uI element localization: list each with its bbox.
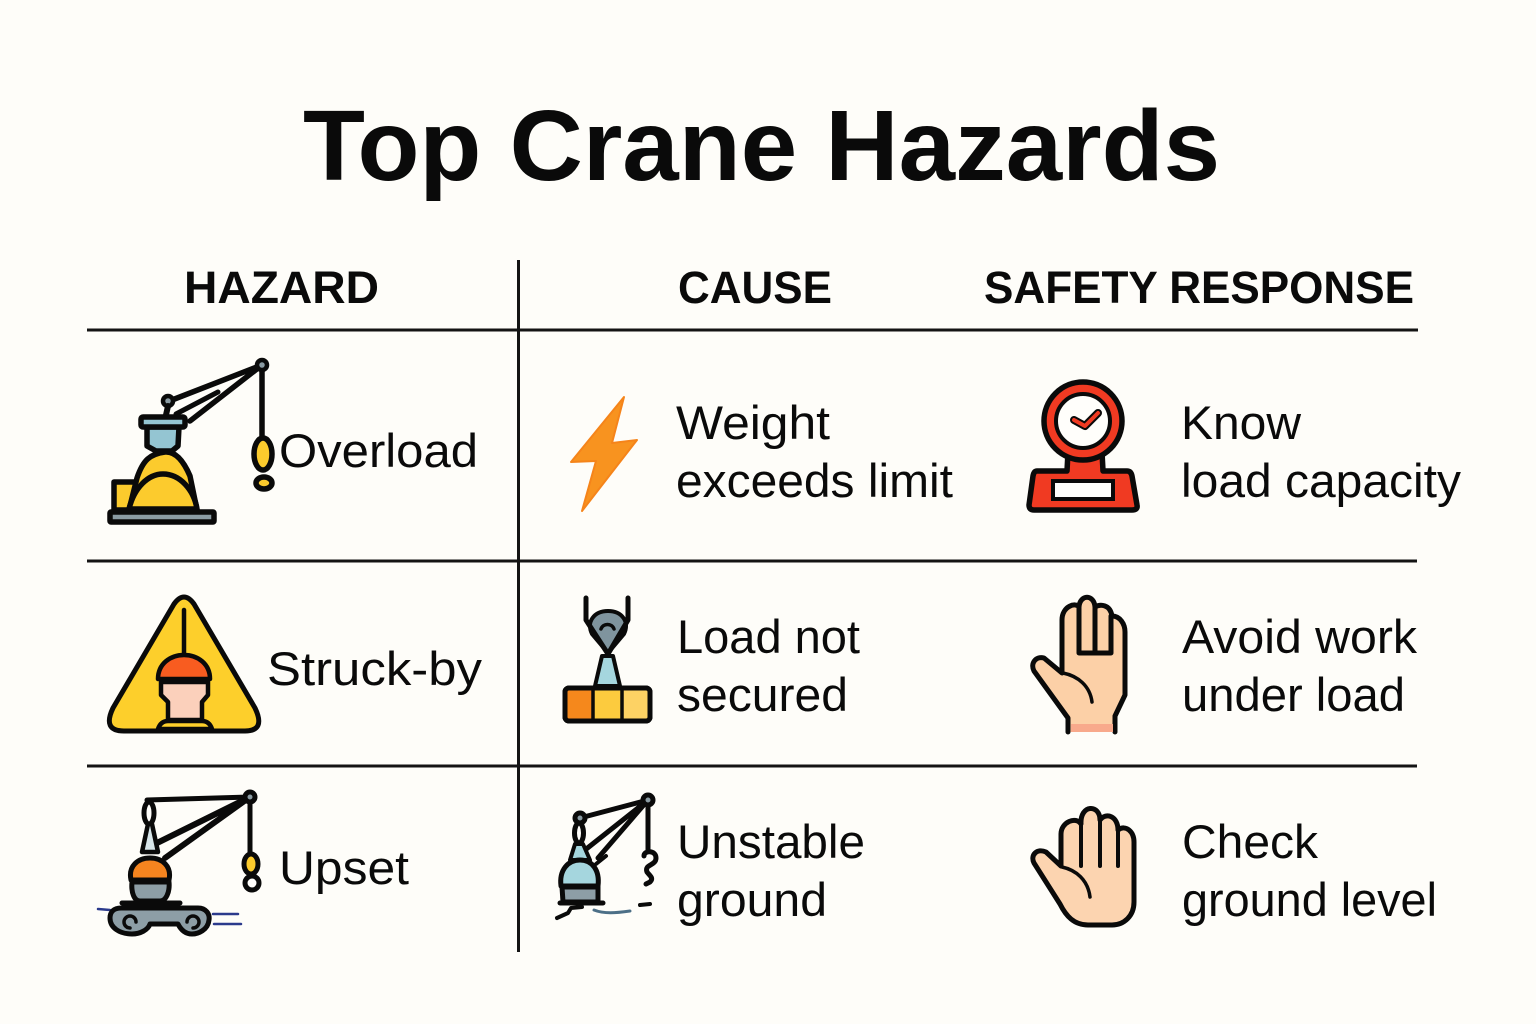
row: struck-by (109, 597, 483, 731)
text: avoid work under load (1182, 610, 1418, 721)
label: overload: Overload (279, 424, 478, 477)
heading: hazard: HAZARD (184, 262, 379, 313)
text: avoid work under load: under load (1182, 668, 1405, 721)
label: upset: Upset (279, 841, 409, 894)
text: check ground level: Check (1182, 815, 1318, 868)
text: weight exceeds limit: exceeds limit (676, 454, 953, 507)
text: unstable ground: Unstable (677, 815, 865, 868)
text: unstable ground: ground (677, 873, 827, 926)
text: unstable ground (677, 815, 865, 926)
text: weight exceeds limit: Weight (676, 396, 830, 449)
icon: load gauge (1029, 382, 1137, 510)
text: weight exceeds limit (676, 396, 953, 507)
heading: safety response: SAFETY RESPONSE (984, 262, 1414, 313)
table column headers (184, 262, 1414, 313)
row: struck-by response (1033, 597, 1418, 732)
row: overload (110, 360, 478, 522)
icon: overloaded crane (110, 360, 272, 522)
row: overload cause (571, 396, 953, 511)
row: upset (98, 792, 409, 934)
title: Top Crane Hazards (303, 90, 1220, 202)
text: load not secured (677, 610, 860, 721)
text: know load capacity (1181, 396, 1462, 507)
icon: tipping crane on tracks (98, 792, 259, 934)
icon: hook with unsecured load (565, 598, 650, 721)
text: know load capacity: load capacity (1181, 454, 1462, 507)
icon: crane on unstable ground (557, 795, 656, 918)
row: struck-by cause (565, 598, 860, 721)
row: upset cause (557, 795, 865, 926)
heading: cause: CAUSE (678, 262, 832, 313)
text: check ground level: ground level (1182, 873, 1437, 926)
text: load not secured: secured (677, 668, 848, 721)
icon: raised hand with wrist (1033, 597, 1125, 732)
icon: lightning bolt (571, 397, 637, 511)
row: overload response (1029, 382, 1462, 510)
text: check ground level (1182, 815, 1437, 926)
icon: warning triangle with worker (109, 597, 259, 731)
icon: open hand (1033, 808, 1134, 925)
label: struck-by: Struck-by (267, 642, 483, 695)
row: upset response (1033, 808, 1437, 926)
text: load not secured: Load not (677, 610, 860, 663)
text: know load capacity: Know (1181, 396, 1302, 449)
text: avoid work under load: Avoid work (1182, 610, 1418, 663)
